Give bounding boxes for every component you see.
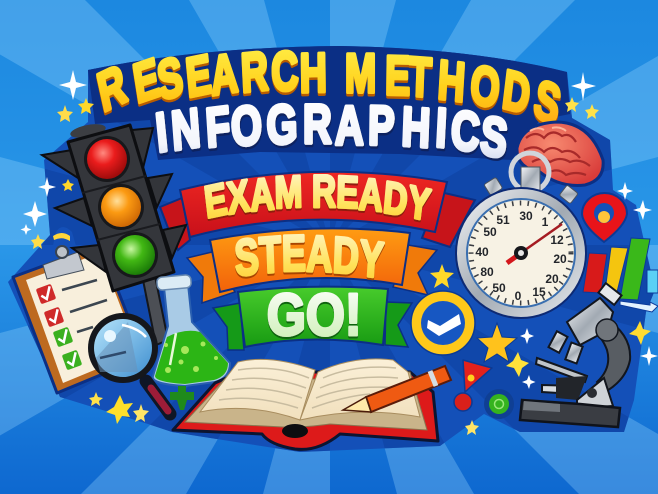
title line 2: INFOGRAPHICS xyxy=(153,94,510,171)
banner: go: GO! xyxy=(267,281,362,348)
icon: stopwatch: 20 xyxy=(545,272,559,286)
icon: stopwatch xyxy=(456,153,586,318)
icon: open book xyxy=(173,359,438,449)
icon: stopwatch: 80 xyxy=(480,265,494,279)
icon: stopwatch: 50 xyxy=(492,281,506,295)
icon: clipboard xyxy=(13,227,144,393)
banner: exam ready xyxy=(160,167,475,250)
icon: green button xyxy=(484,389,514,419)
icon: check badge xyxy=(411,291,475,355)
banner: exam ready: EXAM READY xyxy=(202,167,433,231)
icon: stopwatch: 1 xyxy=(542,215,549,229)
icon: stars xyxy=(31,97,651,435)
bar chart xyxy=(583,238,658,312)
title line 1: RESEARCH METHODS xyxy=(92,39,565,136)
icon: pencil xyxy=(343,366,451,412)
icon: exclamation mark xyxy=(454,360,492,411)
icon: flask xyxy=(153,275,230,386)
icon: map pin xyxy=(582,193,627,242)
icon: stopwatch: 20 xyxy=(553,252,567,266)
banner: steady xyxy=(187,225,437,303)
icon: stopwatch: 0 xyxy=(515,289,522,303)
banner: go xyxy=(213,281,412,350)
icon: stopwatch: 30 xyxy=(519,209,533,223)
navy title plate xyxy=(88,46,570,160)
icon: green cross xyxy=(170,386,194,410)
icon: stopwatch: 15 xyxy=(532,285,546,299)
icon: stopwatch: 51 xyxy=(496,213,510,227)
icon: stopwatch: 12 xyxy=(550,233,564,247)
banner: steady: STEADY xyxy=(233,225,385,289)
icon: stopwatch: 50 xyxy=(483,225,497,239)
icon: sparkles xyxy=(20,70,658,389)
icon: magnifying glass xyxy=(88,313,170,414)
icon: traffic light xyxy=(42,122,186,345)
icon: stopwatch: 40 xyxy=(475,245,489,259)
icon: brain xyxy=(517,122,603,185)
icon: microscope xyxy=(520,283,630,427)
